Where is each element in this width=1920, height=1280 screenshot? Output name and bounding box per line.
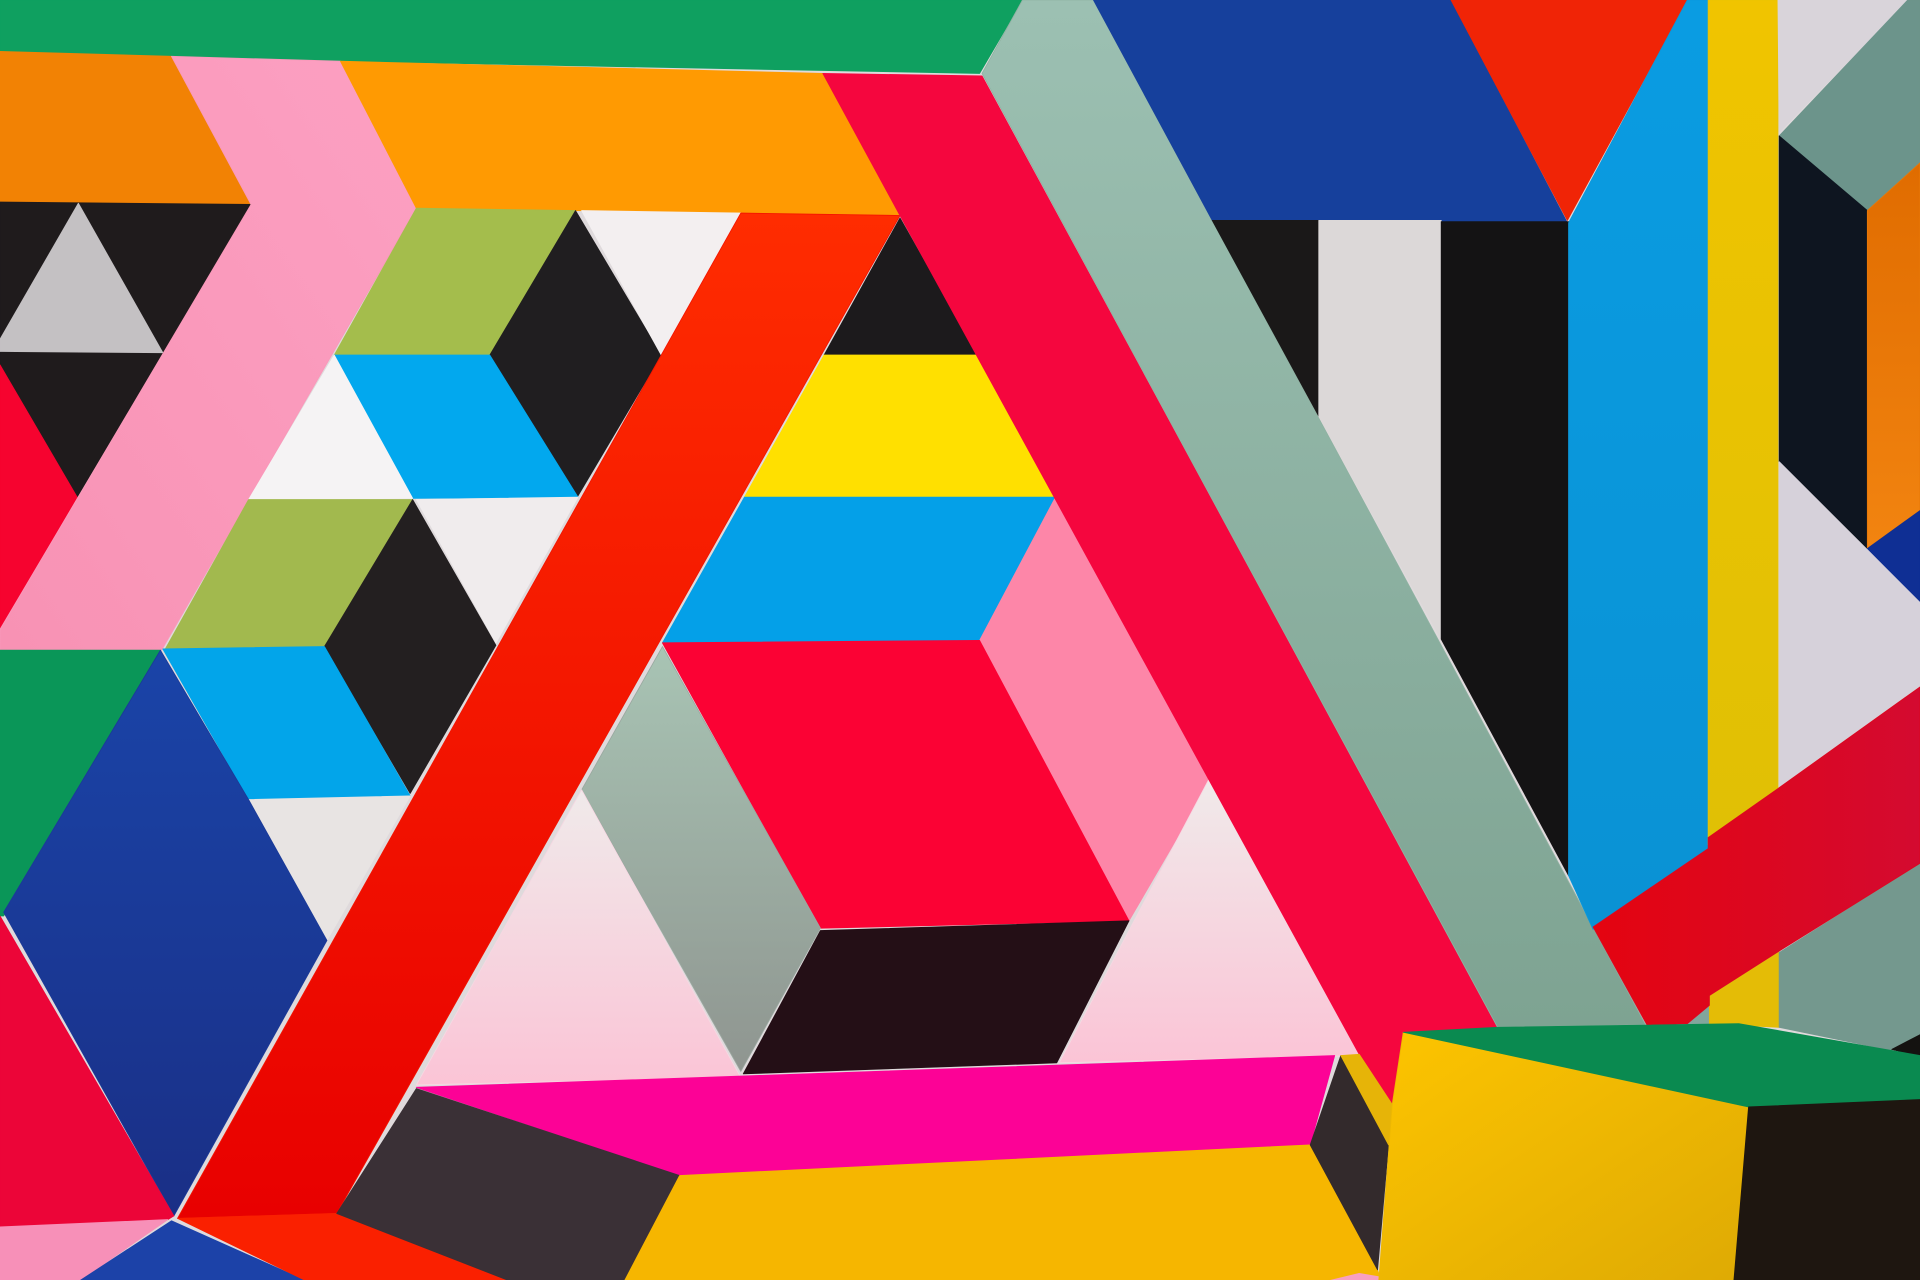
dark maroon parallelogram [743,921,1129,1074]
dark navy panel right [1779,136,1867,549]
black diamond lower [324,500,496,793]
navy top panel [1093,0,1567,223]
grey sage rhombus [582,647,820,1071]
white top right triangle [1778,0,1908,132]
navy diamond [4,650,327,1216]
yellow strip upper [1708,0,1778,845]
red top triangle [1451,0,1687,220]
orange band left [0,51,251,204]
yellow sliver [1341,1054,1392,1145]
cube yellow face [1379,1032,1749,1280]
blue triangle right [1867,511,1920,602]
pale pink triangle left [416,790,741,1085]
white triangle upper [582,211,741,355]
dark side step [1310,1056,1389,1270]
black stripe one [1212,220,1319,416]
white panel right [1779,462,1920,796]
sage top right [1779,0,1920,211]
grey triangle left [0,203,163,353]
sage diagonal band [982,0,1646,1027]
black diamond upper [490,211,661,496]
yellow step [624,1145,1381,1280]
black triangle centre [824,218,977,355]
pink rhombus centre [980,497,1212,921]
blue column [1569,0,1708,929]
sage panel lower right [1779,863,1920,1051]
crimson wedge left [0,365,77,629]
pale pink triangle right [1059,778,1362,1063]
white stripe [1319,220,1441,639]
blue rhombus lower [163,647,410,800]
bright red foot [178,1213,509,1280]
olive rhombus upper [334,208,576,355]
crimson diagonal band [823,73,1498,1104]
orange panel right [1867,163,1920,549]
black triangle field left [0,202,251,497]
white triangle lower [416,497,578,643]
pink chevron [0,56,416,650]
olive rhombus lower [165,500,413,649]
white triangle middle [249,355,413,500]
pink sliver at cube base [1329,1273,1381,1280]
pink corner bottom left [0,1220,168,1280]
dark step left [337,1089,680,1280]
crimson rhombus centre [662,640,1129,928]
orange band centre [340,61,900,216]
blue rhombus upper [334,355,578,498]
green panel left [0,650,160,916]
white triangle bottom [249,796,410,940]
cube green top [1403,1024,1920,1107]
yellow strip lower [1709,951,1779,1027]
crimson triangle bottom left [0,916,174,1227]
blue parallelogram centre [662,497,1056,643]
black stripe two [1441,222,1569,876]
sage sliver under strap [1687,1005,1709,1024]
black corner lower right [1892,1035,1920,1057]
top green band [0,0,1022,73]
blue corner bottom [80,1221,306,1280]
cube dark face [1734,1100,1920,1280]
large red diagonal band [178,213,900,1218]
yellow trapezoid [744,355,1056,497]
crimson strap [1593,687,1920,1025]
magenta band [416,1056,1335,1176]
